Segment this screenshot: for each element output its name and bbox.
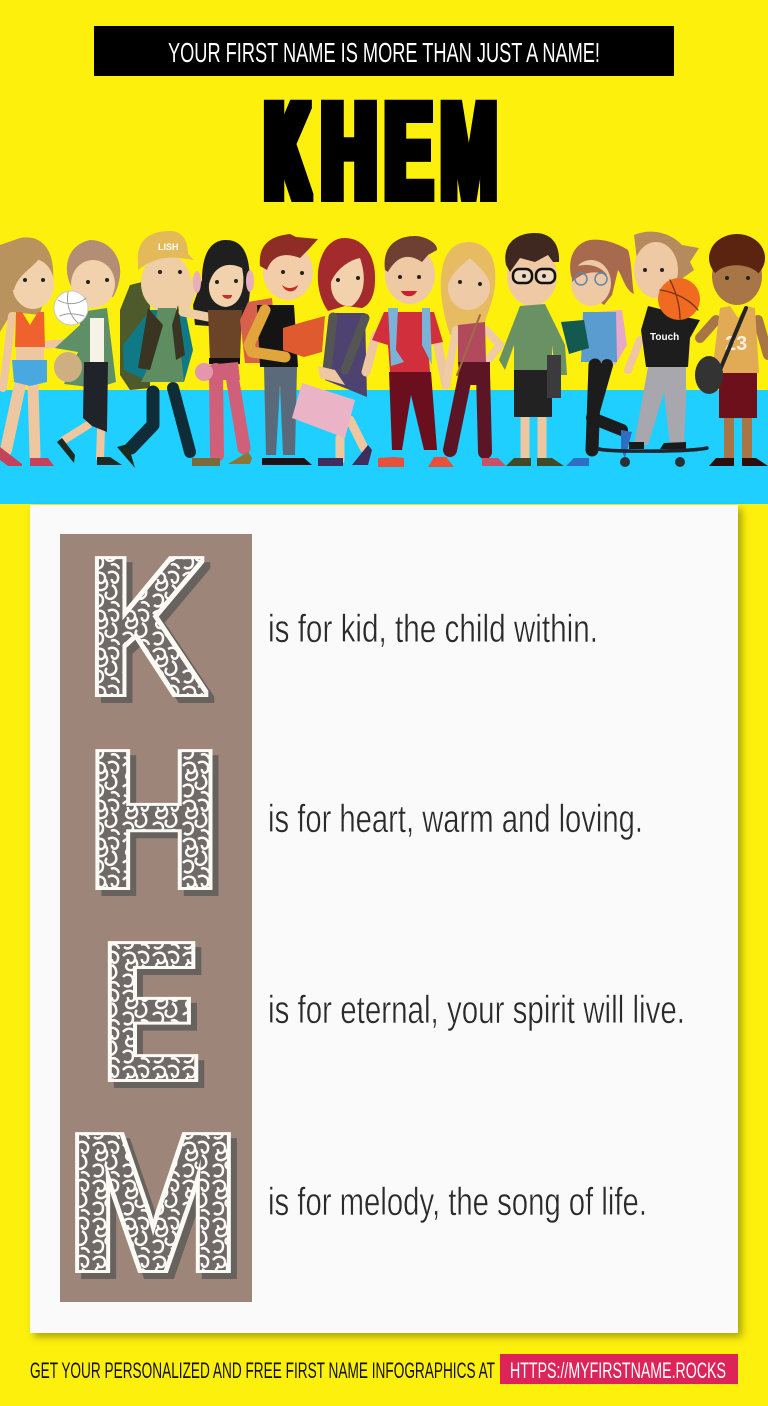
person 12: boy in basketball tank: 23	[725, 333, 747, 355]
person 4: girl with pink headphones	[183, 240, 254, 466]
title: name KHEM	[266, 75, 498, 228]
blue floor band	[0, 390, 768, 504]
person 9: boy with black glasses	[499, 233, 567, 466]
ornamental letter K	[94, 556, 214, 703]
person 1: girl in orange top	[0, 237, 78, 466]
title: name KHEM: H	[322, 75, 376, 228]
person 11: skateboarder with basketball: Touch	[650, 332, 679, 343]
person 10: girl with glasses and tablet	[561, 240, 634, 466]
person 11: skateboarder with basketball	[599, 232, 707, 467]
title: name KHEM: K	[266, 75, 308, 228]
panel: white card	[30, 505, 738, 1333]
ornamental letter H	[95, 749, 218, 896]
title: name KHEM: M	[440, 75, 498, 228]
tagline banner	[94, 26, 674, 76]
ornamental letter E: E	[108, 908, 206, 1127]
text: K meaning: is for kid, the child within.	[268, 608, 598, 651]
person 8: blonde girl	[441, 242, 506, 466]
person 12: boy in basketball tank	[695, 234, 768, 466]
person 2: girl with volleyball	[54, 240, 122, 465]
ornamental letter M: M	[71, 1099, 247, 1318]
ornamental letter M: M	[65, 1093, 241, 1312]
panel: acrostic letter column	[60, 517, 252, 1318]
ornamental letter H: H	[93, 716, 227, 935]
text: H meaning: is for heart, warm and loving.	[268, 798, 643, 841]
person 6: red-haired girl with pink bag	[292, 238, 375, 466]
title: name KHEM: E	[386, 75, 431, 228]
ornamental letter E: E	[102, 902, 200, 1121]
ornamental letter H: H	[87, 710, 221, 929]
ornamental letter E	[108, 941, 204, 1088]
ornamental letter M	[75, 1132, 237, 1279]
person 3: backpacker in yellow cap	[117, 231, 194, 468]
person 5: boy with book and red backpack	[240, 234, 325, 465]
person 3: backpacker in yellow cap: LISH	[158, 242, 179, 252]
ornamental letter K: K	[88, 517, 206, 736]
illustration: group of twelve young people	[0, 231, 768, 468]
text: M meaning: is for melody, the song of life.	[268, 1181, 647, 1224]
person 7: boy in red t-shirt	[366, 236, 454, 467]
ornamental letter K: K	[94, 523, 212, 742]
